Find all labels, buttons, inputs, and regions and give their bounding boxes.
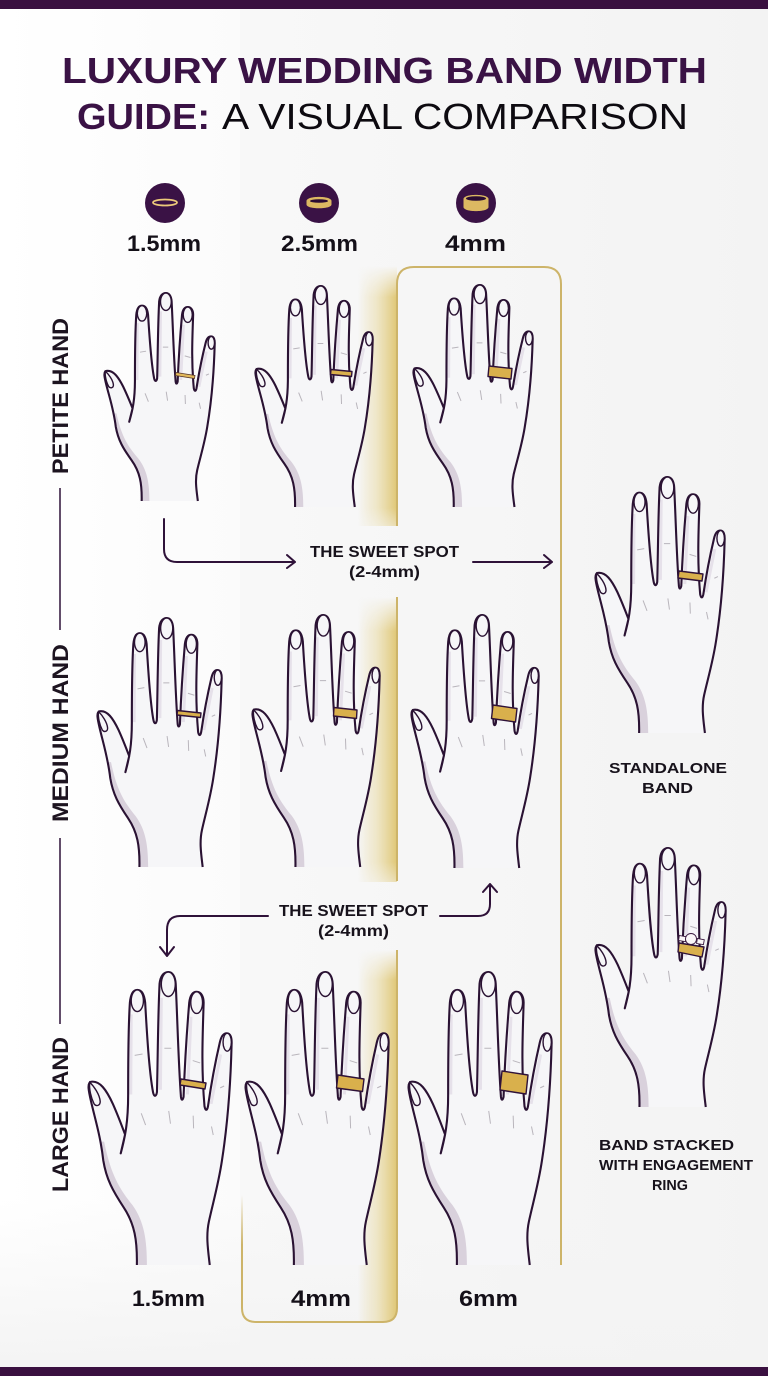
caption: band stacked with engagement ring: BAND STACKED — [599, 1137, 734, 1154]
arrow: petite to sweet spot — [164, 519, 295, 568]
stacked gold band — [678, 943, 704, 957]
caption: band stacked with engagement ring: WITH ENGAGEMENT — [599, 1157, 753, 1174]
hand: petite 2.5mm — [255, 286, 373, 507]
sweet spot label: lower — [279, 903, 428, 940]
width label: bottom 1.5mm: 1.5mm — [132, 1286, 205, 1311]
caption: band stacked with engagement ring — [599, 1137, 753, 1194]
hand: large 6mm — [409, 972, 552, 1265]
side label: petite hand: PETITE HAND — [48, 318, 73, 474]
bottom bar — [0, 1367, 768, 1376]
arrow: sweet spot down to large hand — [160, 916, 268, 956]
title: LUXURY WEDDING BAND WIDTH — [62, 50, 707, 91]
highlight frame: 4mm column — [397, 267, 561, 1265]
hand: medium 2.5mm — [252, 615, 380, 867]
hand: large 1.5mm — [89, 972, 232, 1265]
width label: 2.5mm: 2.5mm — [281, 231, 358, 256]
caption: band stacked with engagement ring: RING — [652, 1177, 688, 1194]
hand: medium 4mm — [411, 615, 539, 868]
hand: band stacked with engagement ring — [595, 848, 726, 1107]
title: A VISUAL COMPARISON — [222, 96, 688, 137]
sweet spot label: top: THE SWEET SPOT — [310, 544, 459, 561]
highlight glow: petite column — [358, 266, 397, 526]
title — [62, 50, 707, 137]
title: GUIDE: — [77, 96, 210, 137]
width label: 4mm: 4mm — [445, 231, 506, 256]
band width icon: 1.5mm — [145, 183, 185, 223]
band width icon: 2.5mm — [299, 183, 339, 223]
sweet spot label: top: (2-4mm) — [349, 564, 420, 581]
highlight glow: medium column — [358, 597, 397, 882]
width label: bottom 4mm: 4mm — [291, 1286, 351, 1311]
width label: 1.5mm: 1.5mm — [127, 231, 201, 256]
sweet spot label: lower: (2-4mm) — [318, 923, 389, 940]
sweet spot label: top — [310, 544, 459, 581]
band width icon: 4mm — [456, 183, 496, 223]
arrow: sweet spot to standalone — [473, 555, 552, 568]
sweet spot label: lower: THE SWEET SPOT — [279, 903, 428, 920]
width label: bottom 6mm: 6mm — [459, 1286, 518, 1311]
hand: petite 4mm — [413, 285, 533, 507]
hand: standalone band — [595, 477, 725, 733]
caption: standalone band — [609, 760, 727, 797]
hand: petite 1.5mm — [104, 293, 215, 501]
highlight frame: large hand 4mm — [242, 950, 397, 1322]
arrow: sweet spot up to medium hand — [440, 884, 497, 916]
engagement ring diamonds — [679, 934, 704, 945]
hand: medium 1.5mm — [97, 618, 222, 867]
top bar — [0, 0, 768, 9]
side label: medium hand: MEDIUM HAND — [48, 644, 73, 822]
caption: standalone band: STANDALONE — [609, 760, 727, 777]
hand: large 4mm — [246, 972, 389, 1265]
highlight glow: large column — [358, 950, 397, 1322]
side label: large hand: LARGE HAND — [48, 1037, 73, 1192]
caption: standalone band: BAND — [642, 780, 693, 797]
